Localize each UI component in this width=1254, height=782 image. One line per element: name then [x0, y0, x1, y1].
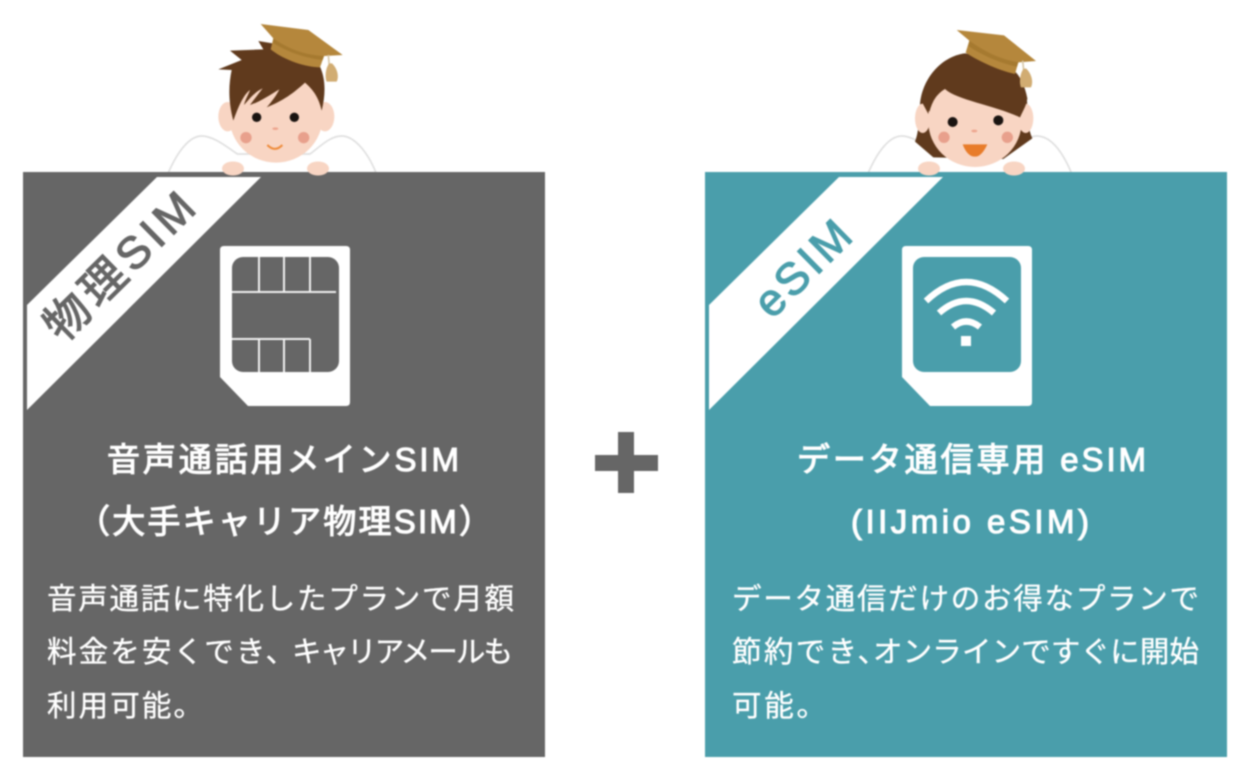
heading: data eSIM: データ通信専用 eSIM	[797, 441, 1146, 478]
heading: main SIM: （大手キャリア物理SIM）	[77, 503, 492, 540]
character: boy with graduation cap	[168, 24, 376, 173]
heading: main SIM: 音声通話用メインSIM	[107, 441, 459, 478]
body text: physical SIM: 利用可能。	[47, 690, 203, 723]
icon: plus sign	[595, 432, 658, 493]
body text: eSIM: 可能。	[732, 690, 826, 723]
body text: physical SIM: 音声通話に特化したプランで月額	[47, 583, 514, 616]
body text: physical SIM: 料金を安くでき、	[47, 636, 295, 669]
body text: eSIM	[732, 583, 1199, 723]
character: girl with graduation cap	[868, 30, 1071, 173]
hands of girl on panel edge	[918, 162, 1025, 176]
panel background grey	[23, 172, 545, 757]
ribbon: 物理SIM	[27, 177, 261, 410]
body text: eSIM: 節約でき、	[732, 636, 887, 669]
icon: SIM card with chip	[220, 246, 350, 406]
ribbon: eSIM	[709, 177, 943, 410]
ribbon: eSIM: eSIM	[743, 210, 862, 327]
heading: data eSIM: (IIJmio eSIM)	[851, 503, 1089, 540]
panel background teal	[705, 172, 1227, 757]
icon: eSIM card with wifi	[902, 246, 1032, 406]
ribbon: 物理SIM: 物理SIM	[34, 182, 205, 351]
heading: data eSIM	[797, 441, 1146, 540]
hands of boy on panel edge	[222, 162, 329, 176]
heading: main SIM	[77, 441, 492, 540]
panel: eSIM	[705, 172, 1227, 757]
panel: physical SIM	[23, 172, 545, 757]
body text: physical SIM	[47, 583, 514, 723]
body text: eSIM: オンラインですぐに開始	[873, 636, 1199, 669]
body text: eSIM: データ通信だけのお得なプランで	[732, 583, 1199, 616]
body text: physical SIM: キャリアメールも	[292, 636, 513, 669]
